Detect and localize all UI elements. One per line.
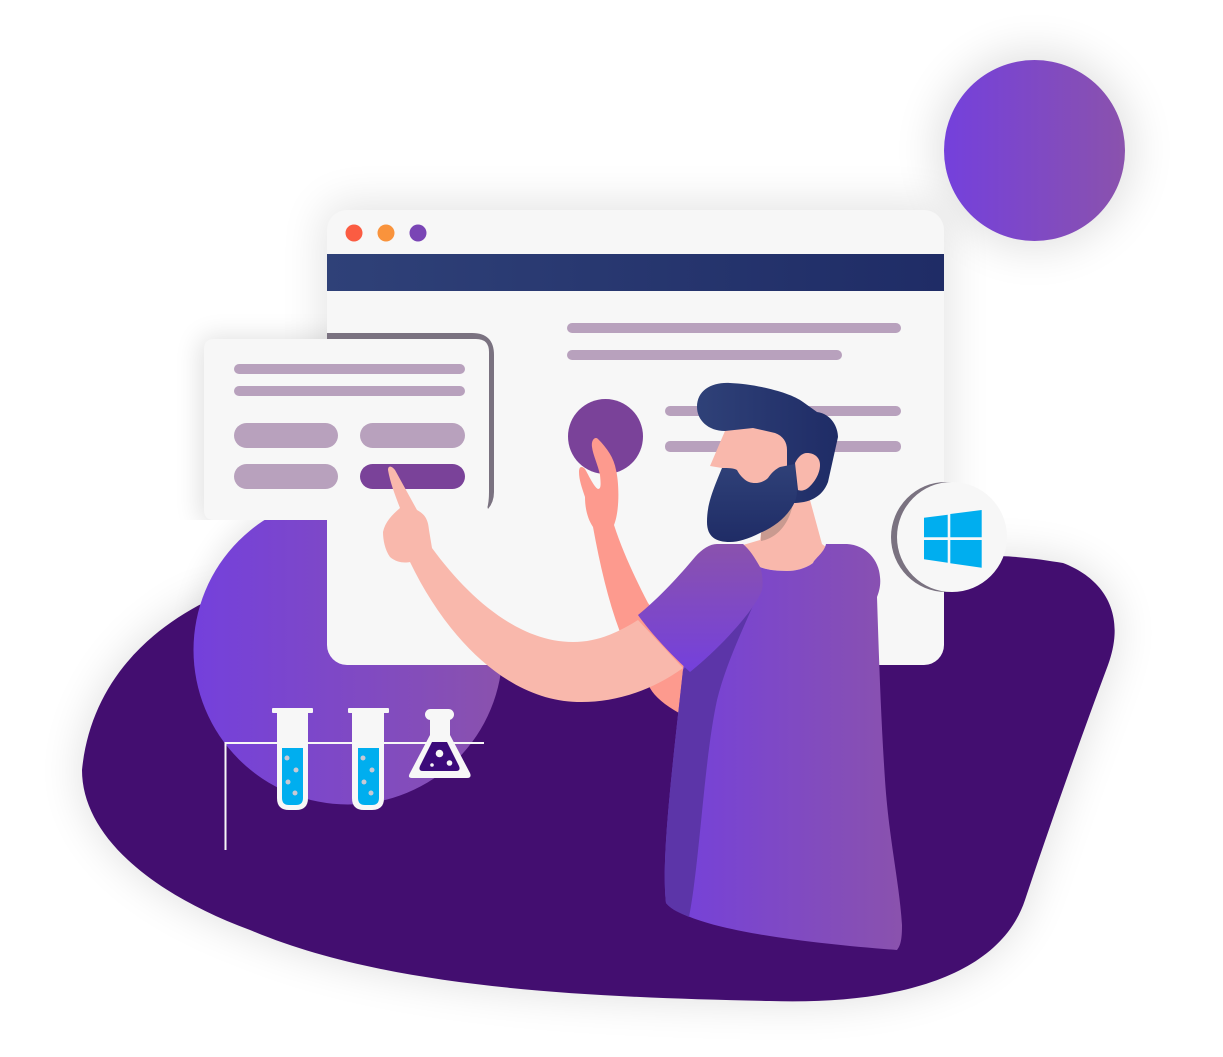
badge grey crescent <box>891 482 1001 592</box>
badge circle <box>897 482 1007 592</box>
back arm and raised hand <box>579 438 690 713</box>
large purple circle shadow <box>192 484 504 796</box>
shirt body <box>665 544 902 950</box>
test tube 2 <box>348 708 389 810</box>
panel button 2 <box>360 423 465 448</box>
face <box>710 428 787 495</box>
window text line 3 <box>665 406 901 416</box>
windows badge <box>891 482 1007 592</box>
hair <box>697 383 838 503</box>
top right circle shadow <box>936 52 1132 248</box>
panel line 1 <box>234 364 465 374</box>
ear <box>795 453 820 491</box>
browser window <box>327 210 944 665</box>
small overlay panel <box>200 333 494 524</box>
shirt shadow side <box>665 585 762 917</box>
man <box>383 383 902 950</box>
window body <box>327 210 944 665</box>
window title bar <box>327 254 944 291</box>
panel button active <box>360 464 465 489</box>
beard <box>707 464 797 542</box>
background blob <box>82 556 1115 1001</box>
panel button 3 <box>234 464 338 489</box>
neck beard shadow <box>761 503 793 541</box>
front arm and pointing hand <box>383 467 683 702</box>
panel line 2 <box>234 386 465 396</box>
panel grey edge <box>327 333 494 509</box>
large purple circle <box>194 496 502 804</box>
lab equipment <box>226 708 484 850</box>
panel shadow <box>192 330 327 520</box>
flask <box>409 709 471 778</box>
test tube 1 <box>272 708 313 810</box>
panel body <box>204 339 489 520</box>
window text line 4 <box>665 441 901 452</box>
blob shadow <box>82 556 1115 1001</box>
shirt sleeve <box>638 544 763 672</box>
top right purple circle <box>944 60 1125 241</box>
window text line 1 <box>567 323 901 333</box>
window dot orange <box>378 224 394 242</box>
window text line 2 <box>567 350 842 360</box>
neck <box>743 500 826 571</box>
icon: windows logo <box>924 510 982 568</box>
window avatar circle <box>568 399 643 474</box>
panel button 1 <box>234 423 338 448</box>
window dot purple <box>410 224 426 242</box>
lab stand <box>226 743 484 850</box>
window shadow <box>323 204 948 669</box>
window dot red <box>346 224 362 242</box>
